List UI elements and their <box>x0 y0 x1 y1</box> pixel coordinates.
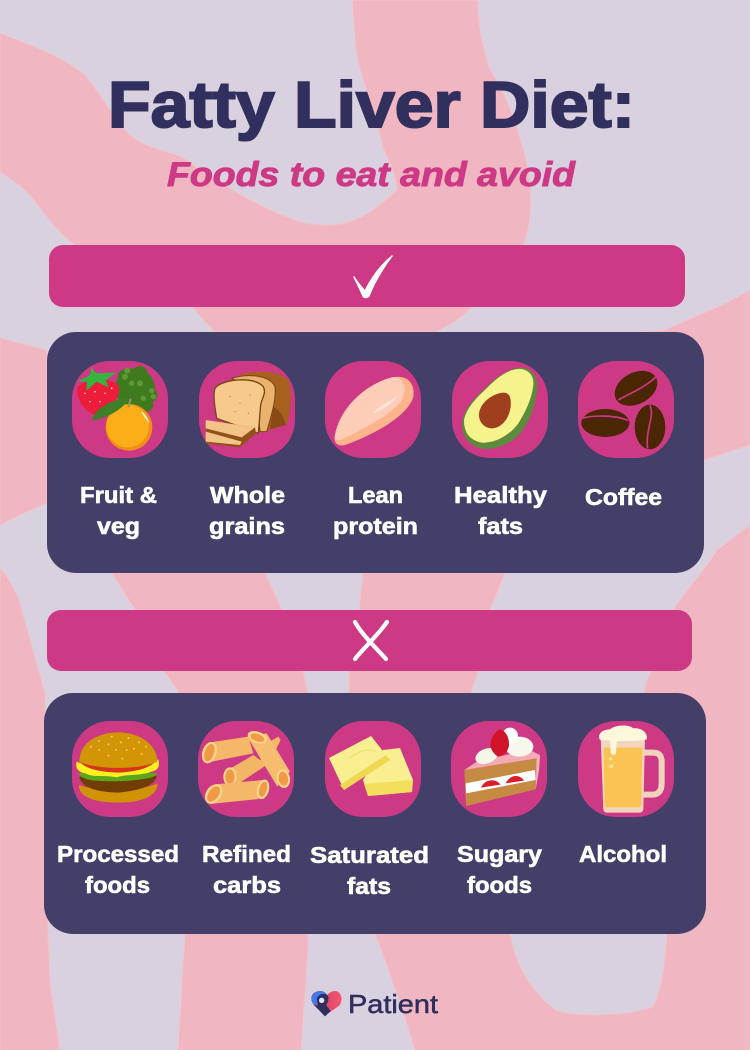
label: Alcohol <box>579 841 667 867</box>
label: Refined <box>202 841 291 867</box>
item: fruit and veg <box>72 361 168 539</box>
item: saturated fats <box>310 721 429 899</box>
item: sugary foods: foods <box>467 872 532 898</box>
subtitle: Foods to eat and avoid <box>167 156 576 194</box>
label: Fruit & <box>80 482 157 508</box>
item: lean protein: protein <box>333 513 418 539</box>
panel: foods to eat <box>47 332 704 573</box>
label: Lean <box>348 482 403 508</box>
label: Processed <box>57 841 179 867</box>
label: Coffee <box>585 484 662 510</box>
item: fruit and veg: veg <box>97 513 140 539</box>
item: coffee <box>578 361 674 510</box>
icon: check mark <box>354 256 392 298</box>
item: healthy fats <box>452 361 548 539</box>
banner: foods to avoid <box>47 610 692 671</box>
panel: foods to avoid <box>44 693 706 934</box>
item: refined carbs: carbs <box>213 872 281 898</box>
title: Fatty Liver Diet: <box>108 68 635 141</box>
label: Healthy <box>454 482 547 508</box>
item: sugary foods <box>451 721 547 898</box>
logo: Patient <box>311 989 439 1019</box>
item: whole grains <box>199 361 295 539</box>
wordmark: Patient <box>348 989 439 1019</box>
label: Whole <box>210 482 285 508</box>
icon: heart <box>311 991 342 1016</box>
item: whole grains: grains <box>209 513 285 539</box>
label: Sugary <box>457 841 542 867</box>
item: healthy fats: fats <box>478 513 523 539</box>
item: processed foods: foods <box>85 872 150 898</box>
item: refined carbs <box>198 721 294 898</box>
item: alcohol <box>578 721 674 867</box>
item: processed foods <box>57 721 179 898</box>
label: Saturated <box>310 842 429 868</box>
icon: cross mark <box>355 622 387 659</box>
item: saturated fats: fats <box>347 873 391 899</box>
item: lean protein <box>325 361 421 539</box>
banner: foods to eat <box>49 245 685 307</box>
